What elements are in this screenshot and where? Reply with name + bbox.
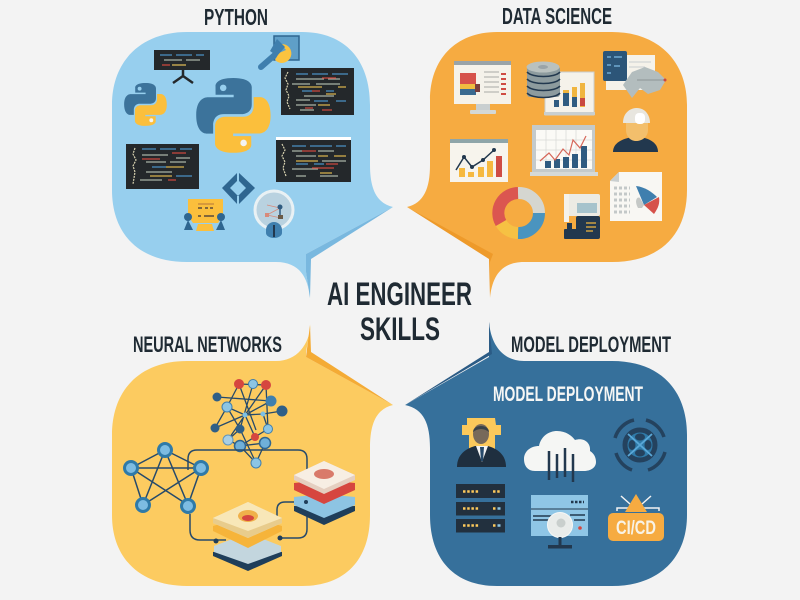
icon: lower layer stack [213,502,282,571]
icon: donut chart [498,193,539,233]
panel: python [112,32,393,298]
icon: report with pie [610,172,662,221]
icon: business person [457,418,506,467]
chart: lower-left neural network [124,444,208,512]
icon: presentation code monitor [154,50,210,83]
title: AI engineer skills [327,276,472,347]
icon: database stack [526,62,560,98]
icon: code window left [126,144,199,189]
icon: dashboard monitor [454,61,511,114]
icon: laptop with chart [530,125,598,176]
icon: upper layer stack [294,461,355,525]
icon: network globe with mouse [255,191,293,238]
heading: python: PYTHON [204,4,268,30]
icon: diamond arrows [222,172,255,205]
heading: neural networks: NEURAL NETWORKS [133,332,282,357]
icon: yellow desktop with people [184,199,225,231]
icon: cloud with bars [524,431,596,482]
icon: CI/CD badge [608,494,664,541]
icon: engineer with helmet [613,108,658,152]
title: AI engineer skills: SKILLS [360,311,440,347]
icon: card and device [564,194,600,239]
icon: bar chart board [544,72,595,115]
chart: upper neural network [210,379,288,468]
icon: circular gear arrows [615,420,665,470]
accent: hexagon edge stripes [306,207,493,405]
icon: code window right bottom [276,137,351,182]
icon: CI/CD badge: CI/CD [616,518,656,539]
icon: small python logo [124,83,167,126]
icon: code window right top [281,68,354,115]
icon: large python logo [196,78,271,153]
icon: server rack [456,484,505,532]
heading: data science: DATA SCIENCE [502,3,612,29]
panel: neural networks [112,324,393,586]
connector wires [188,450,307,540]
heading: inner model deployment: MODEL DEPLOYMENT [493,383,643,406]
title: AI engineer skills: AI ENGINEER [327,276,472,312]
icon: line and bar chart panel [450,139,508,182]
icon: web panel with magnifier [531,495,588,548]
panel: model deployment [405,322,687,586]
heading: model deployment: MODEL DEPLOYMENT [511,332,671,357]
icon: wrench and tablet [261,36,299,67]
central hexagon [311,203,489,408]
icon: documents with speech shapes [603,51,666,98]
panel: data science [407,32,687,298]
